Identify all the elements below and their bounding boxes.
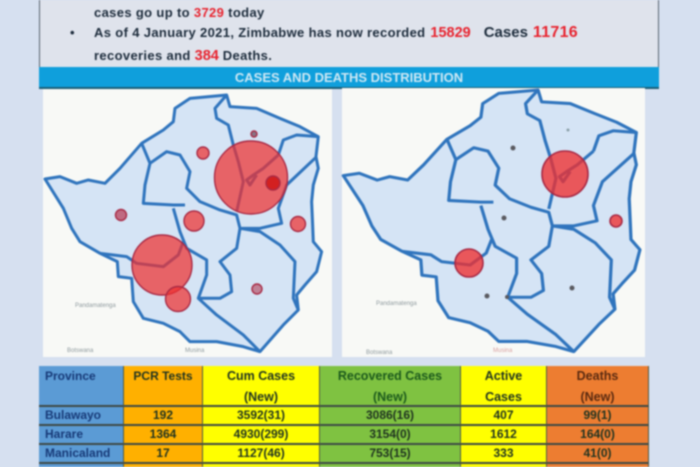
row: Harare: 1364: [150, 427, 176, 441]
row: Manicaland: Manicaland: [45, 446, 110, 460]
row: Manicaland: 41(0): [583, 446, 612, 460]
heading banner: [39, 67, 659, 89]
row: Manicaland: 753(15): [369, 446, 411, 460]
text: cases today: cases go up to 3729 today: [94, 5, 265, 20]
place labels: Musina: [185, 348, 205, 354]
table header: (New): [580, 390, 615, 404]
table header: Active: [485, 368, 522, 382]
place labels: [67, 303, 205, 354]
text: cumulative totals: As of 4 January 2021, Zimbabwe has now recorded 15829 Cases 11716: [94, 24, 578, 41]
table header: Recovered Cases: [338, 368, 442, 382]
bullet: •: [70, 25, 75, 40]
table header: (New): [244, 390, 278, 404]
map: cases distribution: [45, 95, 322, 354]
table header: Cases: [485, 390, 522, 404]
table header: Cum Cases: [227, 368, 295, 382]
row: Manicaland: 17: [156, 446, 170, 460]
place labels: Botswana: [366, 350, 393, 356]
row: Manicaland: 1127(46): [237, 446, 285, 460]
table header: (New): [373, 390, 407, 404]
bubbles: deaths: [455, 151, 622, 277]
row: Bulawayo: 192: [153, 408, 173, 422]
row: Harare: 164(0): [580, 427, 615, 441]
panel: map backgrounds: [43, 89, 332, 357]
table header: Province: [45, 369, 96, 383]
map outline: provinces: [343, 90, 640, 352]
place labels: Musina: [493, 348, 513, 354]
bubbles: cases: [116, 131, 306, 312]
map outline: provinces: [45, 95, 322, 352]
row: Manicaland: 333: [493, 446, 514, 460]
row: Harare: 4930(299): [234, 427, 288, 441]
row: Harare: 1612: [490, 427, 517, 441]
panel: map background right: [342, 88, 645, 357]
row: Bulawayo: 3086(16): [366, 408, 414, 422]
row: Harare: [38, 424, 650, 446]
place labels: Pandamatenga: [75, 303, 116, 309]
text: recoveries and deaths: recoveries and 384 Deaths.: [94, 48, 272, 64]
table: provincial statistics: [38, 364, 650, 467]
table header: [38, 364, 650, 408]
row: cropped: [38, 462, 650, 467]
row: Manicaland: [38, 444, 650, 465]
dots: low deaths: [484, 128, 574, 299]
row: Bulawayo: 99(1): [583, 408, 612, 422]
panel: summary text: [39, 0, 659, 67]
row: Bulawayo: 407: [493, 408, 514, 422]
place labels: Pandamatenga: [376, 301, 417, 307]
table header: Deaths: [577, 368, 618, 382]
row: Harare: 3154(0): [369, 427, 411, 441]
row: Bulawayo: [38, 406, 650, 427]
map: deaths distribution: [343, 90, 640, 356]
heading banner: CASES AND DEATHS DISTRIBUTION: [235, 70, 463, 85]
row: Bulawayo: Bulawayo: [45, 408, 101, 422]
place labels: [366, 301, 513, 356]
place labels: Botswana: [67, 348, 94, 354]
table header: PCR Tests: [133, 369, 193, 383]
row: Bulawayo: 3592(31): [237, 408, 285, 422]
row: Harare: Harare: [45, 427, 83, 441]
